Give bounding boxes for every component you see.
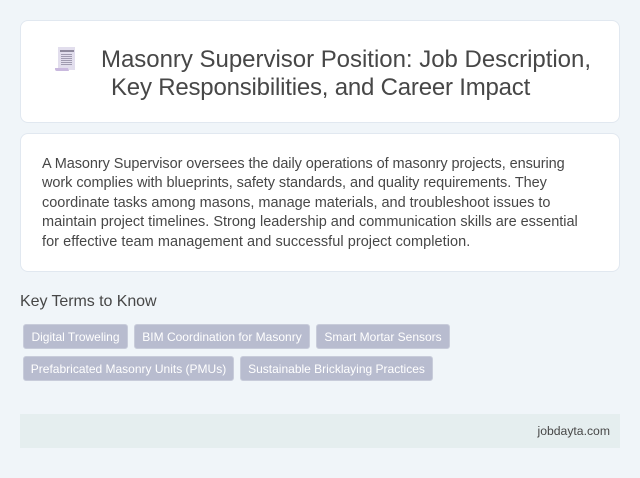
tag [316,324,450,349]
heading line 2: Key Responsibilities, and Career Impact [111,74,530,101]
description text: coordinate tasks among masons, manage materials, and troubleshoot issues to [42,194,550,210]
footer source: jobdayta.com [538,424,610,438]
description text: A Masonry Supervisor oversees the daily operations of masonry projects, ensuring [42,156,565,172]
heading: Masonry Supervisor Position: Job Description, [101,46,591,73]
description text [42,156,578,250]
tag: Prefabricated Masonry Units (PMUs) [31,362,226,376]
tag [23,356,234,381]
panel: description card [20,133,620,272]
heading: key terms: Key Terms to Know [20,293,157,310]
description text: maintain project timelines. Strong leadership and communication skills are essential [42,214,578,230]
icon: document scroll [55,47,75,71]
description text: for effective team management and successful project completion. [42,234,470,250]
tag: Digital Troweling [31,330,120,344]
tag [134,324,310,349]
tag: BIM Coordination for Masonry [142,330,302,344]
panel: title card [20,20,620,123]
tag list [23,324,450,381]
tag [240,356,433,381]
footer bar [20,414,620,448]
tag [23,324,128,349]
description text: work complies with blueprints, safety standards, and quality requirements. They [42,175,547,191]
tag: Sustainable Bricklaying Practices [248,362,425,376]
tag: Smart Mortar Sensors [324,330,442,344]
